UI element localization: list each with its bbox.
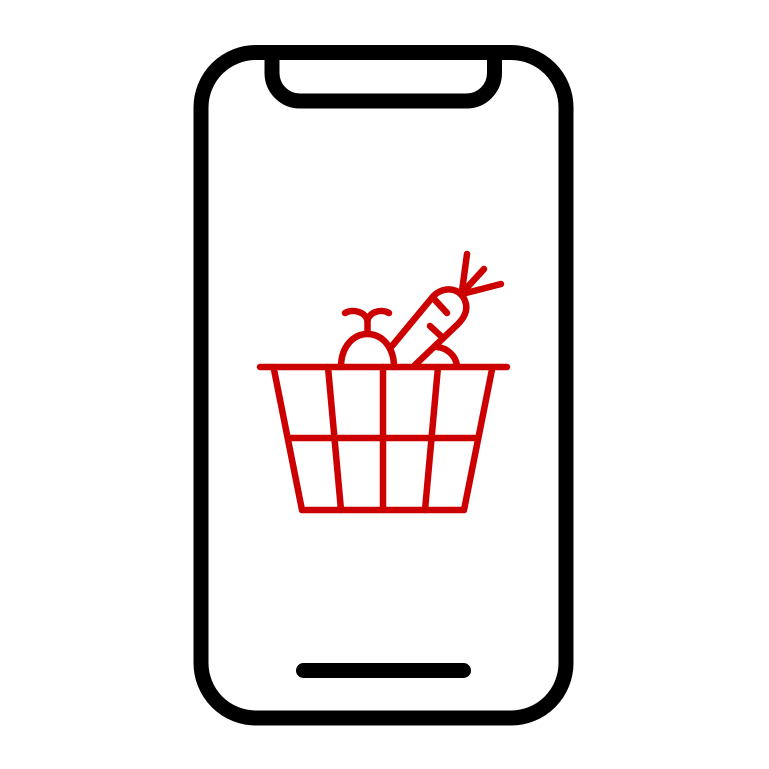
basket vertical wires xyxy=(328,367,438,510)
turnip xyxy=(341,311,394,367)
home indicator bar xyxy=(304,663,464,678)
carrot xyxy=(392,254,501,365)
basket body xyxy=(274,367,492,510)
small vegetable behind carrot xyxy=(437,347,457,365)
icon: grocery basket with vegetables xyxy=(260,254,507,510)
basket horizontal wire xyxy=(288,435,478,441)
basket rim xyxy=(260,364,507,370)
phone body outline xyxy=(201,52,566,718)
icon: smartphone xyxy=(201,52,566,718)
phone notch xyxy=(272,52,494,101)
